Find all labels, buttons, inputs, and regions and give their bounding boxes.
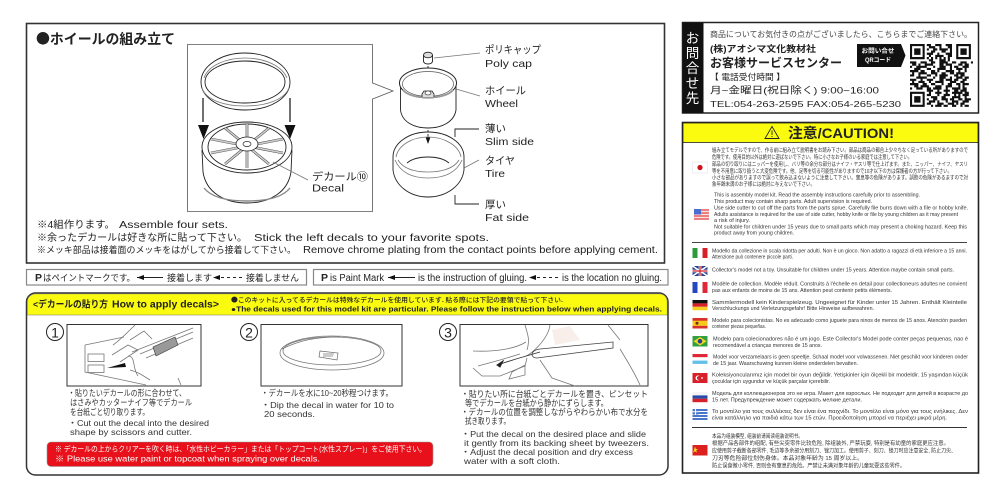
- label: decal: デカール⑩: [312, 170, 369, 183]
- flag: Germany: [692, 300, 708, 310]
- flag: UK: [692, 266, 708, 276]
- text: Chinese warning: [712, 432, 956, 470]
- sidebar: contact title: 先: [686, 91, 699, 106]
- label: wheel: [485, 85, 526, 110]
- text: Chinese warning: 应使用剪子截断各部零件, 毛边等多余部分用刻刀、锉刀加工。使用剪子、刻刀、锉刀时应注意安全, 防止刀尖、: [712, 446, 956, 454]
- text: English warning: Not suitable for children under 15 years due to small parts which may present a choking hazard. Keep this: [714, 224, 967, 230]
- row: German warning: [692, 300, 967, 312]
- illustration: wheel side view: [400, 68, 456, 128]
- text: contact details: [710, 29, 972, 109]
- arrow: poly cap into wheel: [425, 66, 431, 97]
- text: Russian warning: [712, 390, 968, 404]
- sidebar: contact title: お: [686, 31, 699, 46]
- label: tire: Tire: [485, 168, 505, 180]
- text: Portuguese warning: recomendável a crianças menores de 15 anos.: [713, 343, 822, 349]
- heading: how to apply decals: [33, 298, 219, 310]
- flag: USA: [694, 209, 709, 220]
- text: Italian warning: [712, 248, 967, 260]
- sidebar: contact title: 問: [686, 46, 699, 61]
- header band: caution: [683, 123, 978, 142]
- text: French warning: [712, 282, 967, 294]
- step 1 instructions: shape by scissors and cutter.: [70, 427, 192, 437]
- flag: France: [692, 282, 708, 293]
- flag: Turkey: [692, 373, 708, 383]
- legend: English marks: is the location no gluing.: [562, 273, 662, 284]
- text: Japanese warning: 象年齢未満のお子様には絶対に与えないで下さい。: [712, 180, 815, 188]
- badge: QR label: [857, 44, 906, 67]
- legend: English marks: is the instruction of gluing.: [418, 273, 527, 284]
- sidebar: contact title: せ: [686, 76, 699, 91]
- text: English warning: [714, 192, 968, 236]
- text: assembly notes: ※4組作ります。: [37, 218, 115, 231]
- warning bar: red: ※ デカールの上からクリアーを吹く時は、「水性ホビーカラー」または「トップコート(水性スプレー)」をご使用下さい。: [55, 444, 426, 454]
- step 2 instructions: 20 seconds.: [264, 409, 315, 419]
- row: Chinese warning: [692, 432, 956, 470]
- label: fat side: 厚い: [485, 199, 506, 211]
- text: Chinese warning: 根据产品各部件的组配, 有些尖突零件比较危险, 除组装外, 严禁玩耍, 特别是有幼童的家庭更应注意。: [712, 439, 949, 447]
- label: wheel: Wheel: [485, 98, 518, 110]
- label: slim side: 薄い: [485, 122, 506, 135]
- step 3 instructions: ・デカールの位置を調整しながらやわらかい布で水分を: [461, 407, 648, 417]
- step 1 instructions: [68, 388, 209, 437]
- sidebar: contact title: [682, 22, 704, 113]
- step 2 illustration: [261, 324, 402, 386]
- row: Dutch warning: [692, 354, 968, 367]
- heading: caution: 注意/CAUTION!: [788, 125, 894, 141]
- text: Spanish warning: Modelo para colecionistas. No es adecuado como juguete para ninos de menos de 15 anos. Atención pueden: [712, 318, 967, 324]
- row: Russian warning: [692, 390, 968, 404]
- warning bar: red: [47, 442, 433, 466]
- text: Greek warning: [712, 408, 968, 422]
- step 3 instructions: it gently from its backing sheet by tweezers.: [464, 438, 649, 448]
- row: UK warning: [692, 266, 954, 276]
- arrow: right ring arrow: [284, 98, 296, 139]
- step 3 instructions: [461, 389, 649, 466]
- text: assembly notes: [37, 218, 658, 256]
- legend: Japanese marks: 接着しません: [246, 272, 299, 283]
- illustration: poly cap: [424, 52, 432, 64]
- text: Portuguese warning: Modelo para colecionadores não é um jogo. Este Collector's Model pode conter peças pequenas, nao é: [713, 336, 968, 342]
- label: poly cap: Poly cap: [485, 58, 532, 70]
- label: decal: Decal: [312, 182, 344, 194]
- text: Dutch warning: de 15 jaar. Waarschuwing kunnen kleine onderdelen bevatten.: [713, 361, 858, 367]
- badge: QR label: お問い合せ: [862, 47, 894, 55]
- step 3 illustration: [460, 324, 648, 386]
- step 1 instructions: を台紙ごと切り取ります。: [70, 407, 149, 417]
- text: decal introduction: ●このキットに入ってるデカールは特殊なデカールを使用しています. 貼る際には下記の要領で貼って下さい.: [231, 294, 563, 304]
- text: Turkish warning: [712, 372, 968, 385]
- label: wheel: ホイール: [485, 85, 526, 97]
- text: Turkish warning: çocuklar için uygundur ve küçük parçalar içerebilir.: [712, 379, 830, 385]
- text: contact details: 月~金曜日(祝日除く) 9:00~16:00: [710, 84, 879, 96]
- legend: English marks: is Paint Mark: [330, 273, 385, 284]
- step 3 instructions: water with a soft cloth.: [463, 456, 560, 466]
- step 3 number: [440, 324, 456, 340]
- step 1 illustration: [67, 324, 201, 386]
- illustration: wheel with spokes: [202, 122, 292, 203]
- step 3 instructions: ・貼りたい所に台紙ごとデカールを置き、ピンセット: [461, 389, 648, 399]
- text: French warning: Modèle de collection. Modèle réduit. Construits à l'échelle en detail pour collectioneurs adultes ne convient: [712, 282, 967, 288]
- QR code: [910, 45, 973, 106]
- text: Japanese warning: [712, 146, 969, 188]
- flag: Greece: [692, 409, 708, 420]
- label: poly cap: ポリキャップ: [485, 44, 541, 56]
- text: Greek warning: Το μοντέλο για τους συλλέκτες δεν είναι ένα παιχνίδι. Το μοντέλο είναι μόνο για τους ενήλικες. Δεν: [712, 408, 968, 415]
- text: German warning: Sammlermodell kein Kinderspielzeug. Ungeeignet für Kinder unter 15 Jahren. Enthält Kleinteile: [712, 300, 967, 306]
- step 3 instructions: ・Put the decal on the desired place and slide: [461, 429, 646, 439]
- panel: wheel assembly: [26, 24, 664, 263]
- text: contact details: お客様サービスセンター: [710, 55, 842, 70]
- icon: warning triangle: [765, 126, 779, 138]
- row: Greek warning: [692, 408, 968, 422]
- callout frame: wheel detail: [188, 44, 393, 212]
- text: assembly notes: ※メッキ部品は接着面のメッキをはがしてから接着して下さい。: [37, 244, 296, 255]
- flag: Netherlands: [692, 354, 708, 364]
- label: fat side: [485, 199, 529, 224]
- step 3 instructions: ・Adjust the decal position and dry excess: [461, 447, 633, 457]
- text: French warning: pas aux enfants de moins de 15 ans. Attention peut contenir petits éléments.: [712, 288, 892, 294]
- text: English warning: Adults assistance is required for the use of side cutter, hobby knife or file by young children as it may present: [714, 212, 958, 218]
- text: UK warning: Collector's model not a toy. Unsuitable for children under 15 years. Attention maybe contain small parts.: [712, 268, 954, 274]
- step 2 number: 2: [245, 324, 253, 340]
- arrow: left ring arrow: [198, 98, 209, 139]
- sidebar: contact title: 合: [686, 61, 700, 76]
- legend: English marks: P: [321, 272, 328, 284]
- badge: QR label: QRコード: [865, 57, 891, 64]
- label: poly cap: [485, 44, 541, 70]
- text: contact details: 【 電話受付時間 】: [710, 72, 785, 82]
- text: assembly notes: Stick the left decals to your favorite spots.: [254, 232, 489, 244]
- text: Chinese warning: 刀刃等危险部位划伤身体。本品对象年龄为 15 周岁以上。: [712, 454, 863, 462]
- text: English warning: Use side cutter to cut off the parts from the parts sprue. Carefully file burrs down with a file or hobby knife.: [714, 206, 968, 212]
- step 2 instructions: ・Dip the decal in water for 10 to: [261, 400, 394, 410]
- heading: wheel assembly: ●ホイールの組み立て: [36, 29, 175, 49]
- arrow: wheel into tire: [426, 130, 430, 144]
- flag: Italy: [692, 248, 708, 258]
- step 3 number: 3: [444, 324, 452, 340]
- legend: Japanese marks: はペイントマークです。: [43, 273, 135, 283]
- step 1 instructions: ・Cut out the decal into the desired: [68, 418, 209, 428]
- text: assembly notes: Assemble four sets.: [119, 219, 228, 231]
- text: English warning: This is assembly model kit. Read the assembly instructions carefully prior to assembling.: [714, 192, 920, 198]
- heading: how to apply decals: How to apply decals>: [112, 298, 219, 310]
- flag: China: [692, 445, 708, 456]
- flag: Japan: [692, 162, 708, 173]
- row: English warning: [694, 192, 968, 236]
- step 1 instructions: ・貼りたいデカールの形に合わせて、: [68, 388, 186, 398]
- text: English warning: This product may contain sharp parts. Adult supervision is required.: [714, 199, 872, 205]
- panel: contact: [682, 22, 978, 113]
- row: Italian warning: [692, 248, 967, 260]
- row: Portuguese warning: [692, 336, 968, 349]
- text: assembly notes: ※余ったデカールは好きな所に貼って下さい。: [37, 231, 247, 244]
- row: French warning: [692, 282, 967, 294]
- step 2 number: [240, 324, 258, 340]
- text: decal introduction: [231, 294, 662, 314]
- text: Italian warning: Attenzione può contenere piccole parti.: [712, 254, 793, 260]
- text: contact details: TEL:054-263-2595 FAX:054-265-5230: [710, 99, 901, 109]
- flag: Russia: [692, 392, 708, 402]
- step 1 instructions: はさみやカッターナイフ等でデカール: [70, 398, 192, 408]
- row: Turkish warning: [692, 372, 968, 385]
- text: English warning: a risk of injury.: [714, 218, 750, 224]
- row: Japanese warning: [692, 146, 969, 188]
- text: decal introduction: ●The decals used for this model kit are particular. Please follow the instruction below when applying decals.: [231, 306, 662, 314]
- warning bar: red: ※ Please use water paint or topcoat when spraying over decals.: [55, 454, 320, 464]
- text: Japanese warning: 等を不用意に取り扱うと大変危険です。他、足等を切る可能性がありますので10才以下の方は保護者の方が行って下さい。: [712, 167, 952, 175]
- text: Spanish warning: [712, 318, 967, 330]
- legend: Japanese marks: P: [35, 272, 42, 284]
- panel: how to apply decals: [26, 293, 668, 475]
- text: Greek warning: είναι κατάλληλο για παιδιά κάτω των 15 ετών. Προειδοποίηση μπορεί να περιέχει μικρά μέρη.: [712, 414, 947, 422]
- label: fat side: Fat side: [485, 212, 529, 224]
- label: tire: [485, 155, 515, 180]
- heading: how to apply decals: <デカールの貼り方: [33, 298, 108, 310]
- text: Russian warning: Модель для коллекционеров это не игра. Макет для взрослых. Не подходит для детей в возрасте до: [712, 390, 968, 397]
- leader: decal: [273, 162, 308, 180]
- text: Dutch warning: Model voor verzamelaars is geen speeltje. Schaal model voor volwassenen. Niet geschikt voor kinderen onder: [713, 354, 968, 360]
- text: Spanish warning: contener piezas pequeñas.: [712, 324, 766, 330]
- text: contact details: 商品についてお気付きの点がございましたら、こちらまでご連絡下さい。: [710, 29, 972, 39]
- step 1 number: [46, 324, 64, 340]
- label: decal: [312, 170, 369, 194]
- step 1 number: 1: [51, 324, 59, 340]
- legend: Japanese marks: [26, 270, 306, 285]
- text: Chinese warning: 本品为组装模型, 组装前请阅读组装说明书。: [712, 432, 803, 440]
- row: Spanish warning: [692, 318, 967, 330]
- header band: yellow: [27, 294, 667, 315]
- legend: English marks: [314, 270, 668, 285]
- step 3 instructions: 拭き取ります。: [465, 416, 510, 426]
- label: slim side: Slim side: [485, 136, 534, 148]
- illustration: rim ring: [201, 53, 290, 110]
- label: slim side: [485, 122, 534, 148]
- step 2 instructions: ・デカールを水に10~20秒程つけます。: [261, 388, 393, 398]
- step 3 instructions: 等でデカールを台紙から静かにずらします。: [465, 398, 608, 408]
- leader: part callout lines: [434, 53, 480, 204]
- text: Chinese warning: 防止误食微小零件, 否则会有窒息的危险。严禁让未满对象年龄的儿童玩耍这些零件。: [712, 462, 905, 470]
- text: assembly notes: Remove chrome plating from the contact points before applying cement.: [303, 245, 658, 256]
- text: German warning: [712, 300, 967, 312]
- step 2 instructions: [261, 388, 394, 419]
- flag: Brazil: [692, 336, 708, 346]
- legend: Japanese marks: 接着します: [167, 272, 212, 283]
- text: Japanese warning: 危険です。使用目的以外は絶対に遊ばないで下さい。特に小さなお子様のいる家庭では注意して下さい。: [712, 153, 912, 161]
- text: contact details: (株)アオシマ文化教材社: [710, 43, 816, 54]
- text: Portuguese warning: [713, 336, 968, 349]
- label: tire: タイヤ: [485, 155, 515, 167]
- text: Dutch warning: [713, 354, 968, 367]
- text: Russian warning: 15 лет. Предупреждение может содержать мелкие детали.: [712, 398, 862, 404]
- panel: caution: [682, 122, 978, 473]
- illustration: tire: [393, 132, 464, 197]
- text: German warning: Verschluckungs und Verletzungsgefahr! Bitte Hinweise aufbewahren.: [712, 306, 874, 312]
- text: Turkish warning: Koleksiyoncularımız için model bir oyun değildir. Yetişkinler için ölçekli bir modeldir. 15 yaşından küçük: [712, 372, 968, 378]
- text: English warning: product away from young children.: [714, 230, 794, 236]
- text: Italian warning: Modello da collezione in scala ridotta per adulti. Non è un gioco. Non adatto a ragazzi di età inferiore a 15 anni.: [712, 248, 967, 254]
- flag: Spain: [692, 318, 708, 328]
